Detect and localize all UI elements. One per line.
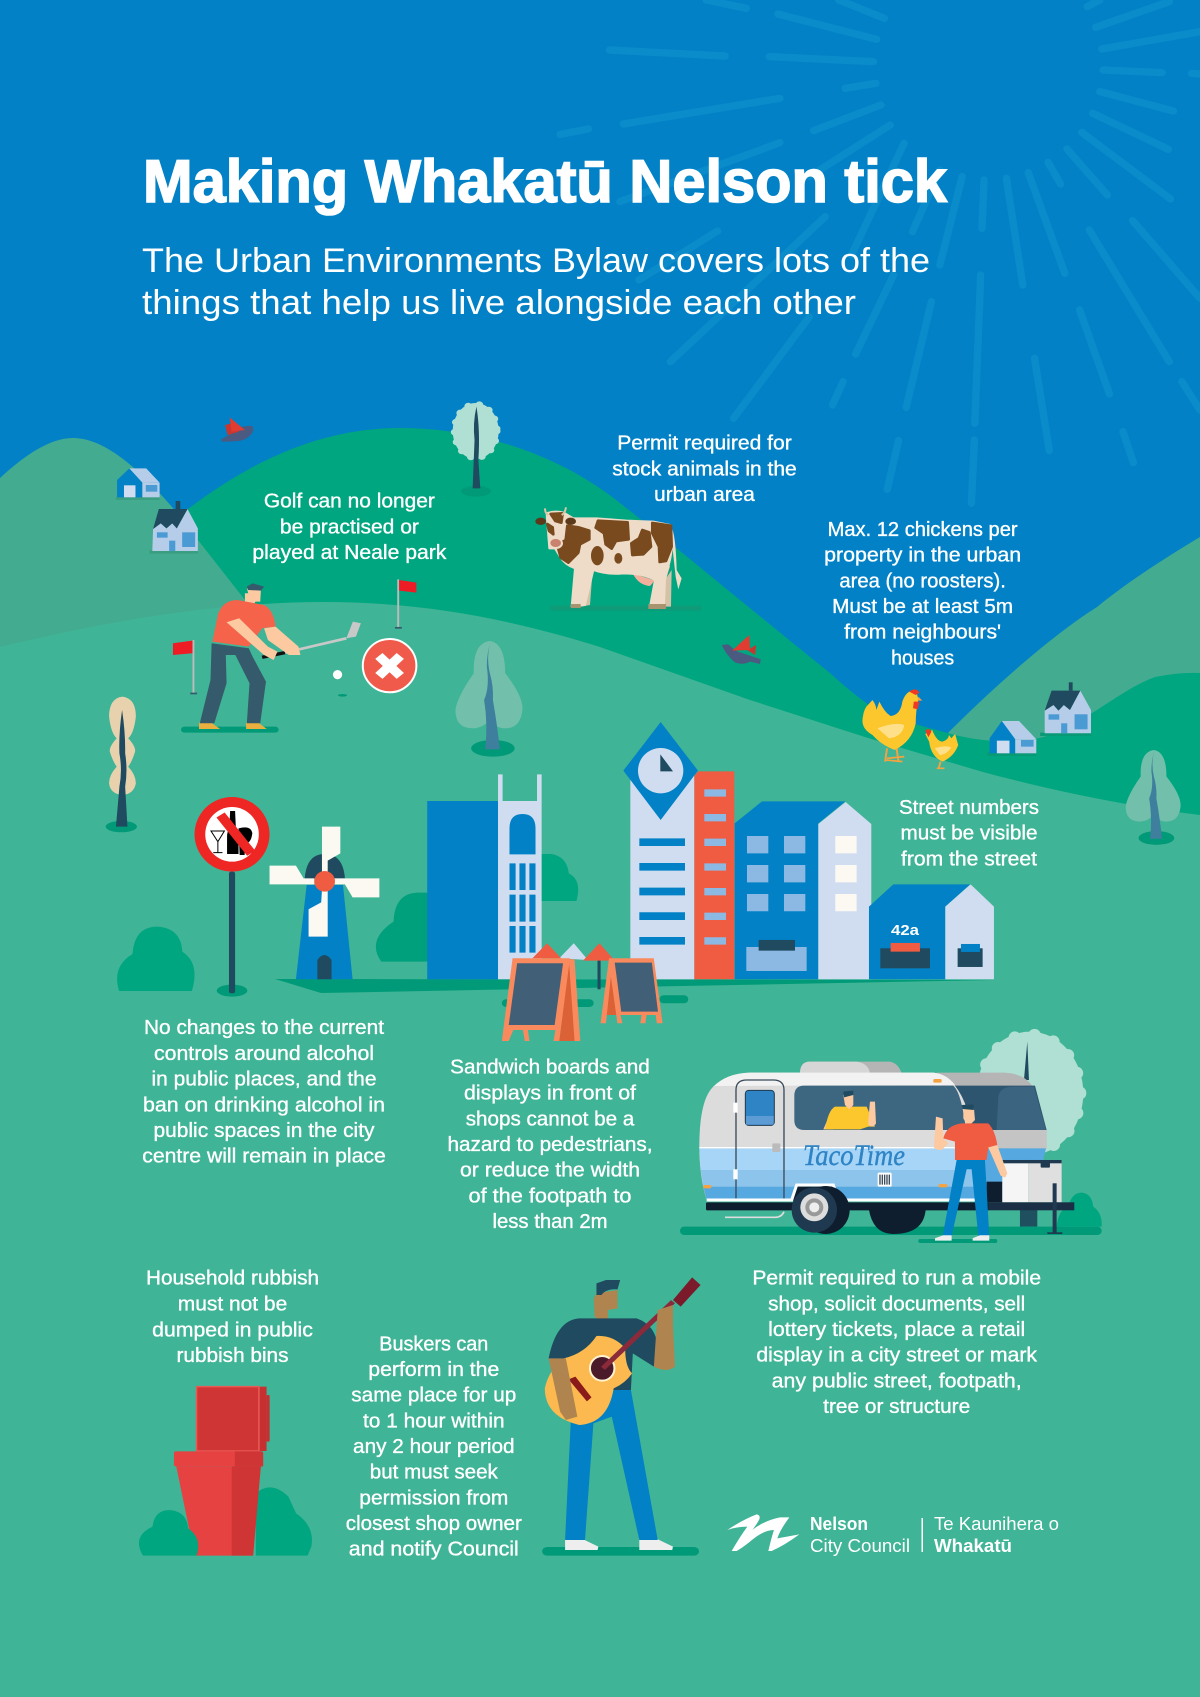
umbrellas <box>532 943 615 990</box>
rubbish text: Household rubbish <box>146 1268 319 1290</box>
church <box>427 774 542 979</box>
alcohol text: centre will remain in place <box>142 1146 386 1168</box>
roof vent <box>800 1062 902 1073</box>
logo wording <box>810 1514 1059 1556</box>
street numbers text: Street numbers <box>899 797 1039 819</box>
tree behind truck <box>977 1032 1083 1227</box>
wheels <box>792 1186 926 1234</box>
street numbers text: must be visible <box>900 823 1038 845</box>
chickens text: houses <box>891 647 954 669</box>
logo wording: Nelson <box>810 1514 868 1534</box>
box and hitch <box>987 1160 1062 1202</box>
bush right <box>256 1487 312 1556</box>
guitar <box>545 1277 701 1425</box>
shop light <box>945 884 994 979</box>
footpath shadows <box>502 995 688 1007</box>
stock animals text: urban area <box>654 484 756 506</box>
heading: Making Whakatū Nelson tick <box>143 148 948 215</box>
busker text: any 2 hour period <box>353 1436 515 1458</box>
mobile shop text: lottery tickets, place a retail <box>768 1319 1025 1341</box>
busker text: and notify Council <box>349 1539 519 1561</box>
busker text: Buskers can <box>379 1333 488 1355</box>
mobile shop text: shop, solicit documents, sell <box>768 1293 1025 1315</box>
windmill <box>270 827 379 979</box>
bin lid <box>197 1387 270 1451</box>
subheading: things that help us live alongside each other <box>142 284 856 322</box>
logo wording: Whakatū <box>934 1536 1012 1556</box>
alcohol ban sign <box>195 797 270 997</box>
golf text <box>252 491 447 564</box>
clock tower and buildings <box>623 722 994 979</box>
window <box>794 1086 966 1130</box>
vendor <box>823 1091 876 1129</box>
customer <box>918 1104 1007 1243</box>
chickens <box>862 689 958 768</box>
busker text: but must seek <box>370 1462 499 1484</box>
alcohol text: No changes to the current <box>144 1017 384 1039</box>
orange building <box>694 771 734 979</box>
shop blue <box>869 884 970 979</box>
ground strip <box>275 979 993 993</box>
subheading: The Urban Environments Bylaw covers lots of the <box>142 242 930 280</box>
stock animals text: stock animals in the <box>612 458 797 480</box>
door <box>733 1080 784 1198</box>
busker text: to 1 hour within <box>363 1410 505 1432</box>
tree beige <box>106 697 137 832</box>
logo mark <box>727 1514 799 1551</box>
chickens text: area (no roosters). <box>839 570 1006 592</box>
sandwich boards text: displays in front of <box>464 1083 636 1105</box>
logo wording: Te Kaunihera o <box>934 1514 1059 1534</box>
stock animals text <box>612 432 797 506</box>
busker text: same place for up <box>351 1385 516 1407</box>
mobile shop text: Permit required to run a mobile <box>752 1268 1041 1290</box>
chickens text: Must be at least 5m <box>832 596 1013 618</box>
board back <box>601 958 663 1023</box>
sandwich boards text: Sandwich boards and <box>450 1057 650 1079</box>
ground shadow <box>680 1227 1102 1235</box>
chickens text: Max. 12 chickens per <box>828 519 1018 541</box>
bird right <box>722 635 761 664</box>
sandwich boards <box>502 943 688 1041</box>
golf text: Golf can no longer <box>264 491 435 513</box>
houses right <box>987 682 1091 756</box>
back left hill <box>0 438 260 700</box>
chassis <box>706 1183 1074 1234</box>
cow <box>535 507 702 611</box>
tree on hill <box>453 403 499 497</box>
mobile shop text: display in a city street or mark <box>756 1345 1038 1367</box>
street numbers text <box>899 797 1039 870</box>
taco time lettering: TacoTime <box>803 1139 905 1172</box>
council logo <box>727 1514 1059 1556</box>
rubbish text: must not be <box>178 1294 287 1316</box>
rubbish text <box>146 1268 319 1367</box>
right green hill <box>900 673 1200 900</box>
clock tower <box>623 722 698 979</box>
golf text: played at Neale park <box>252 542 447 564</box>
golf ball <box>333 670 342 679</box>
flag right <box>395 579 416 629</box>
alcohol text <box>142 1017 386 1168</box>
busker text <box>346 1333 522 1561</box>
flag left <box>173 640 197 694</box>
light building <box>818 802 871 979</box>
mobile shop text: any public street, footpath, <box>772 1370 1022 1392</box>
street numbers text: from the street <box>901 848 1037 870</box>
alcohol text: in public places, and the <box>152 1069 376 1091</box>
bush <box>1057 1193 1102 1227</box>
mobile shop text: tree or structure <box>823 1396 970 1418</box>
vent and lights <box>703 1079 947 1188</box>
sandwich boards text: of the footpath to <box>468 1185 632 1207</box>
golf text: be practised or <box>280 516 419 538</box>
tree centre <box>455 641 522 757</box>
trailer body <box>699 1073 977 1200</box>
sun rays <box>560 0 1200 503</box>
front hill <box>0 602 1200 1697</box>
rubbish text: rubbish bins <box>176 1345 288 1367</box>
logo wording: City Council <box>810 1536 910 1556</box>
chickens text: from neighbours' <box>844 622 1001 644</box>
rear of trailer <box>937 1073 1047 1200</box>
alcohol text: public spaces in the city <box>154 1120 374 1142</box>
subheading <box>142 242 930 322</box>
sandwich boards text: hazard to pedestrians, <box>448 1134 652 1156</box>
back right hill <box>944 537 1200 900</box>
street number 42a: 42a <box>891 922 920 939</box>
blue building <box>735 801 845 979</box>
bushes city left <box>117 854 578 991</box>
sandwich boards text: shops cannot be a <box>466 1108 635 1130</box>
houses left <box>116 468 198 554</box>
busker text: closest shop owner <box>346 1513 522 1535</box>
busker with guitar <box>542 1277 701 1556</box>
chickens text: property in the urban <box>824 545 1021 567</box>
bin body <box>174 1451 263 1556</box>
golfer <box>173 579 416 733</box>
alcohol text: controls around alcohol <box>154 1043 374 1065</box>
chickens text <box>824 519 1021 669</box>
busker text: perform in the <box>368 1359 499 1381</box>
tree right <box>1126 750 1181 845</box>
sandwich boards text: less than 2m <box>492 1211 608 1233</box>
busker text: permission from <box>359 1487 508 1509</box>
board front <box>502 958 580 1041</box>
mobile shop text <box>752 1268 1041 1418</box>
stock animals text: Permit required for <box>617 432 792 454</box>
food truck scene <box>680 1032 1102 1243</box>
wheelie bin with bushes <box>139 1387 312 1556</box>
bush left <box>139 1510 198 1556</box>
alcohol text: ban on drinking alcohol in <box>143 1094 385 1116</box>
bird left <box>221 417 253 442</box>
sandwich boards text <box>448 1057 652 1233</box>
icon: no cross <box>363 639 416 692</box>
rubbish text: dumped in public <box>152 1319 313 1341</box>
sandwich boards text: or reduce the width <box>460 1160 640 1182</box>
main green hill <box>0 428 1200 1000</box>
